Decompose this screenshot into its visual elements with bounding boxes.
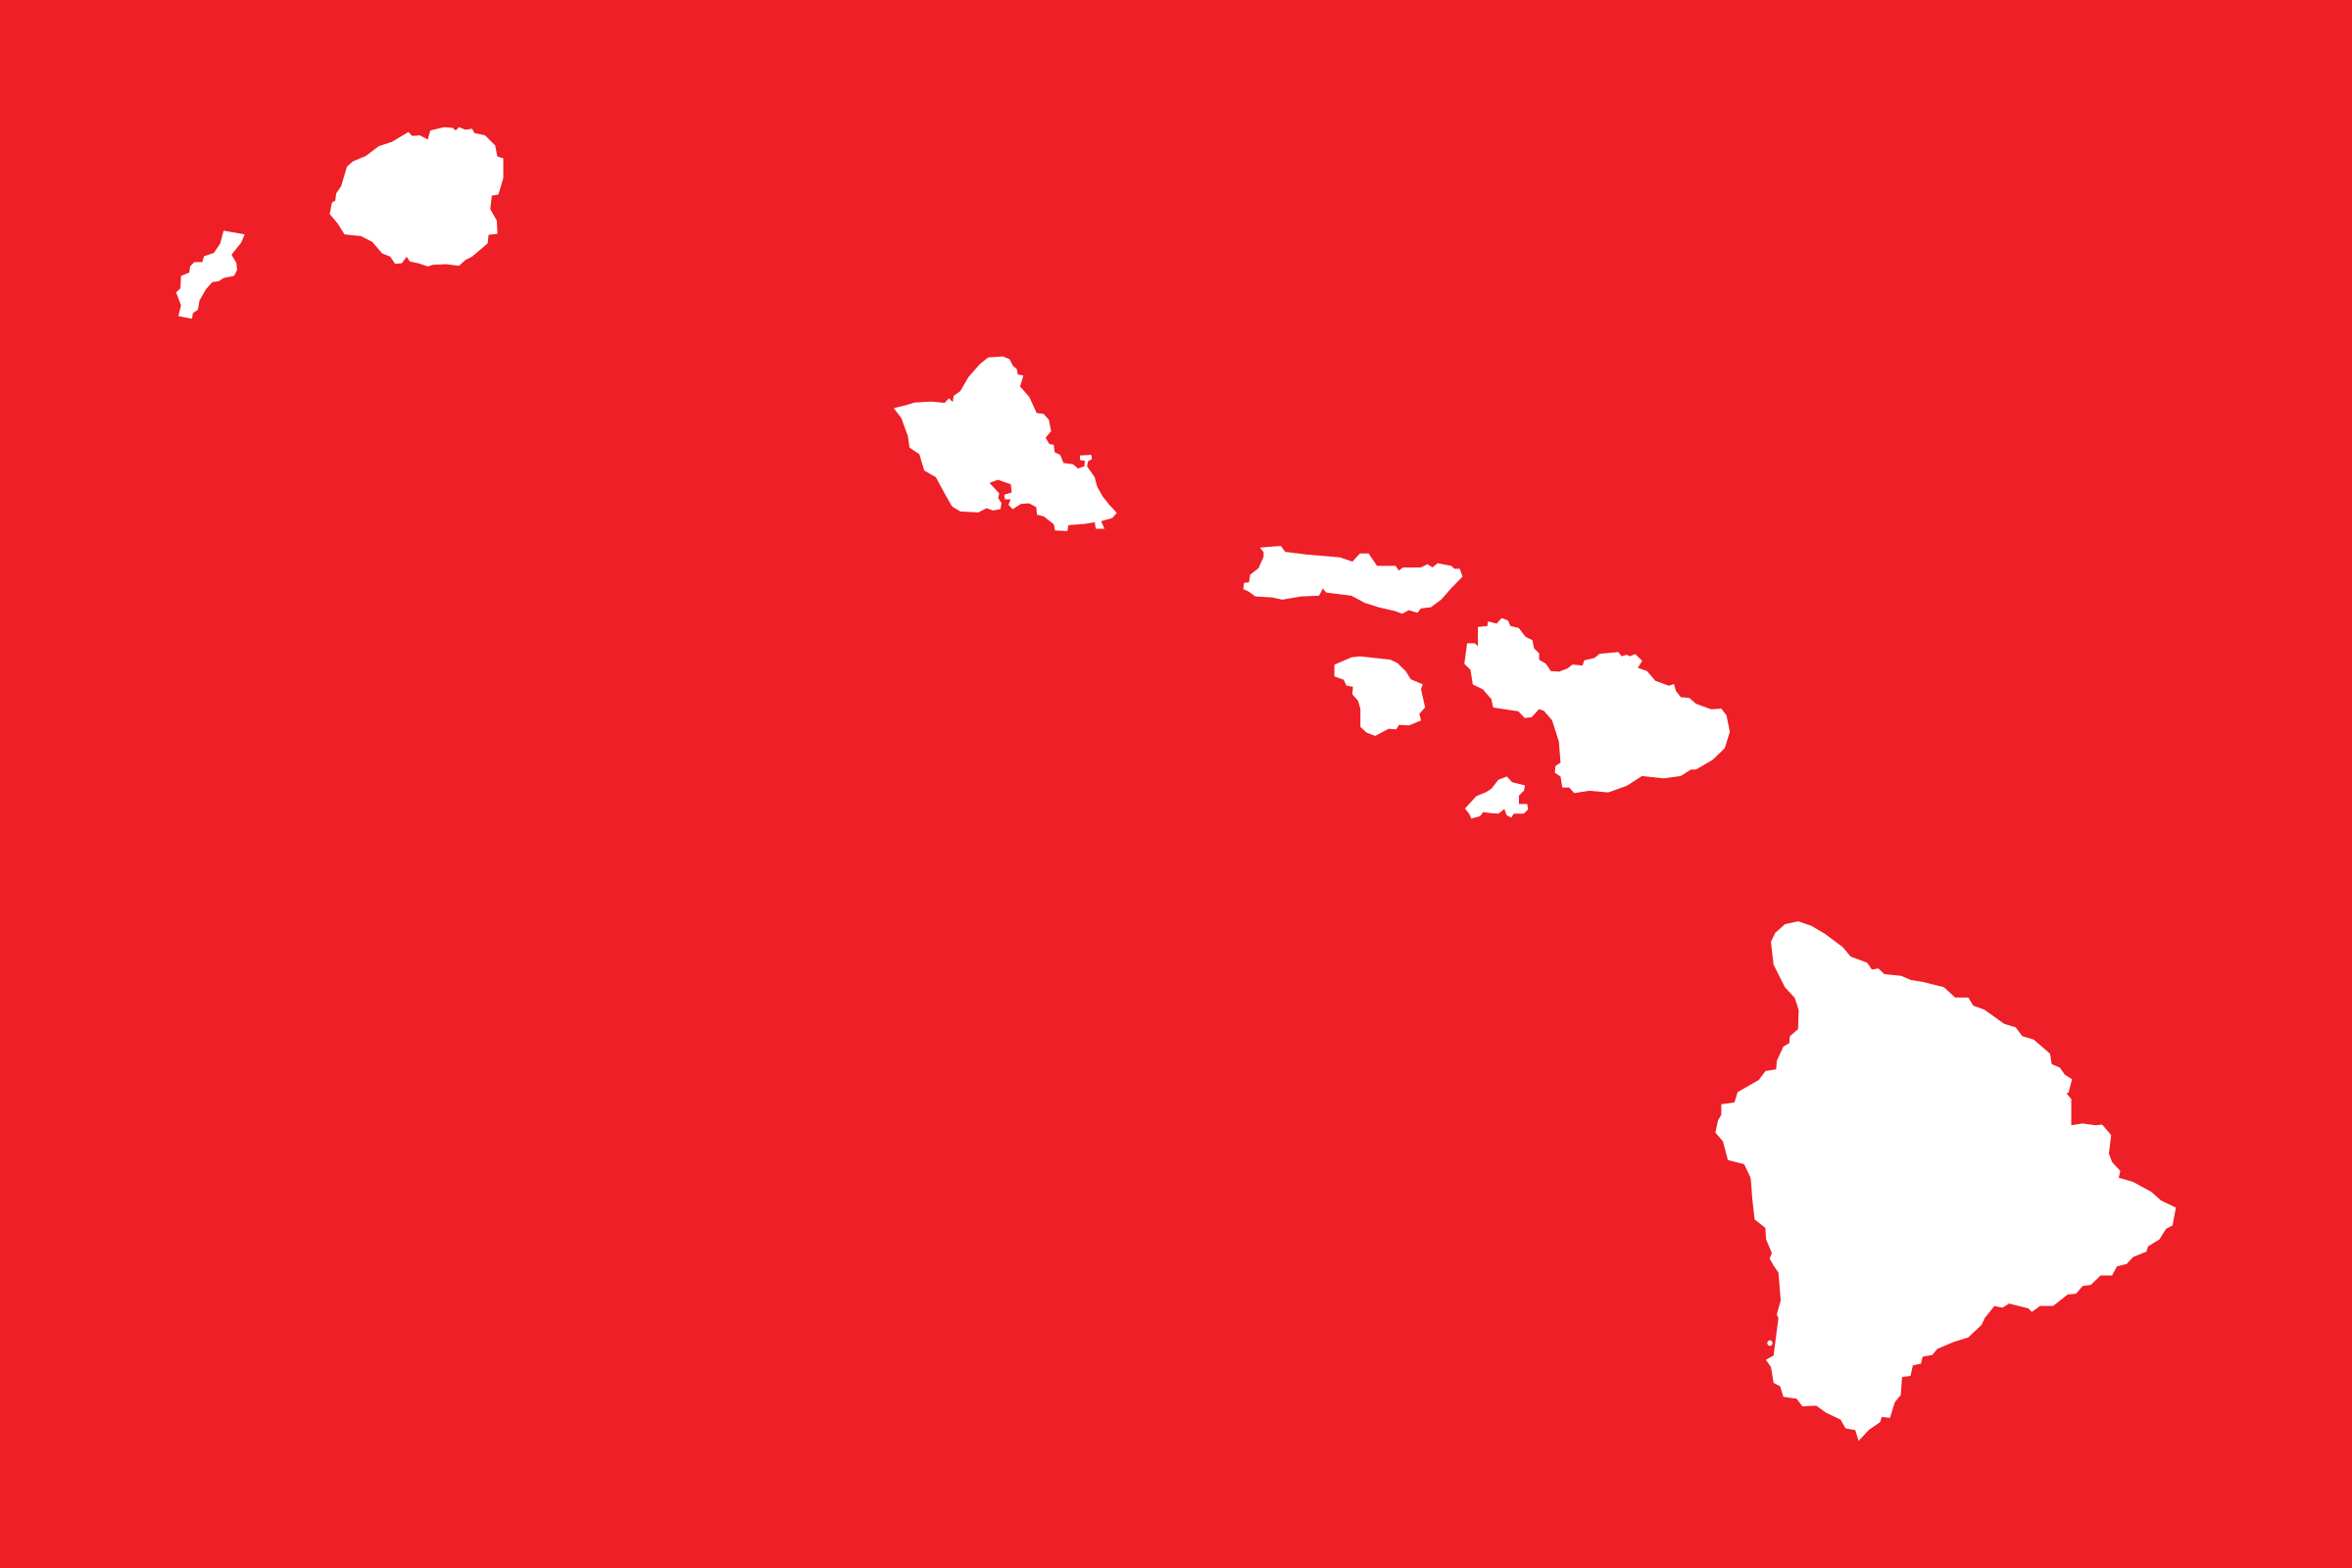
island: Kauai [330, 127, 503, 267]
island: Lanai [1335, 657, 1425, 736]
island: Kahoolawe [1465, 777, 1528, 818]
island: Maui [1465, 618, 1730, 793]
island: Niihau [176, 231, 244, 318]
island: Hawaii (Big Island) [1716, 921, 2176, 1441]
island: Oahu [894, 357, 1116, 531]
island: Molokai [1244, 546, 1462, 613]
